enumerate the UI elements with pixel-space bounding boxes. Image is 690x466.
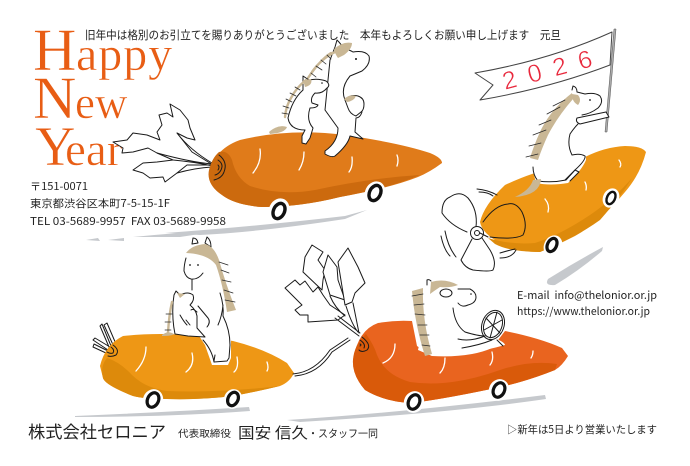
title: Happy New Year <box>33 17 173 178</box>
carrot tops <box>93 323 116 353</box>
carrot car: bottom left <box>93 237 350 414</box>
carrot shading <box>209 152 420 207</box>
steering wheel <box>478 307 508 346</box>
propeller <box>441 189 516 271</box>
middle horse <box>288 76 329 144</box>
carrot body <box>100 334 294 399</box>
big horse mane <box>334 43 352 58</box>
flag banner: 2026 <box>475 29 616 132</box>
flag pole <box>605 29 616 132</box>
representative: 代表取締役 <box>178 426 232 440</box>
contact details <box>517 288 657 319</box>
carrot leaves: bottom <box>285 245 365 336</box>
title: Happy New Year: ew <box>75 78 128 128</box>
title: Happy New Year: N <box>33 65 76 131</box>
baby mane and tail <box>168 302 172 333</box>
big horse <box>185 245 231 365</box>
rope to next carrot <box>293 338 350 376</box>
address block <box>30 179 226 229</box>
year text: 2026 <box>499 45 595 96</box>
carrot body <box>209 132 442 207</box>
carrot car: top left <box>113 40 442 225</box>
carrot shading <box>488 178 632 252</box>
rider horse <box>515 86 609 197</box>
contact details: E-mail info@thelonior.or.jp <box>517 288 657 303</box>
title: Happy New Year: H <box>33 17 76 83</box>
highlights <box>136 347 268 372</box>
highlights <box>383 344 533 373</box>
hood outline <box>483 204 525 238</box>
highlights <box>253 149 398 173</box>
flag arm <box>576 112 609 124</box>
big horse mane <box>186 244 236 312</box>
wheels <box>265 178 389 225</box>
horse mane <box>530 93 573 160</box>
title: Happy New Year: Y <box>35 116 75 178</box>
carrot car: bottom right <box>285 245 568 416</box>
carrot body <box>480 146 646 252</box>
road shadows <box>75 210 603 422</box>
representative: ・スタッフ一同 <box>308 426 378 441</box>
tail <box>269 126 287 134</box>
representative: 国安 信久 <box>238 422 308 443</box>
middle horse mane <box>285 80 306 117</box>
stem rings <box>214 155 225 180</box>
greeting text: 旧年中は格別のお引立てを賜りありがとうございました 本年もよろしくお願い申し上げます 元旦 <box>85 27 561 43</box>
driver horse <box>412 274 508 356</box>
wheels <box>139 386 245 414</box>
title: Happy New Year: appy <box>76 28 173 81</box>
address block: TEL 03-5689-9957 FAX 03-5689-9958 <box>30 214 226 229</box>
carrot car: top right <box>441 86 646 271</box>
carrot shading <box>102 358 280 399</box>
title: Happy New Year: ear <box>65 124 123 176</box>
driver mane <box>412 281 458 356</box>
wheels <box>540 186 622 260</box>
baby horse <box>173 291 205 337</box>
goggles <box>440 289 452 297</box>
horse group: bottom left <box>162 237 236 365</box>
representative <box>178 422 378 443</box>
baby horse on chest <box>344 95 364 116</box>
carrot shading <box>353 334 557 403</box>
horse group: top <box>269 40 369 157</box>
tail <box>515 179 541 197</box>
address block: 〒151-0071 <box>30 179 88 194</box>
carrot body <box>353 321 568 403</box>
highlights <box>545 160 621 212</box>
address block: 東京都渋谷区本町7-5-15-1F <box>30 196 170 211</box>
company name: 株式会社セロニア <box>28 418 166 443</box>
wheels <box>400 376 513 416</box>
carrot leaves: top <box>113 104 213 182</box>
contact details: https://www.thelonior.or.jp <box>517 304 650 319</box>
big horse <box>325 40 369 157</box>
business notice: ▷新年は5日より営業いたします <box>507 422 657 437</box>
